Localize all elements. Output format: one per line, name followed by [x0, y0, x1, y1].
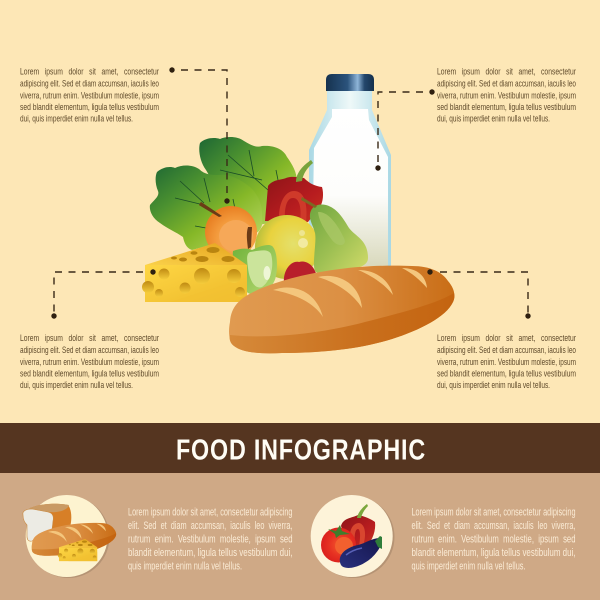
text block: top right	[437, 66, 577, 124]
text block: middle left	[20, 333, 160, 391]
text block: top left: viverra, rutrum enim. Vestibulum molestie, ipsum	[20, 90, 159, 102]
illustration: back lettuce leaf	[199, 137, 297, 228]
connector: bottom right	[427, 269, 531, 319]
text block: bottom left: rutrum enim. Vestibulum molestie, ipsum sed	[128, 534, 293, 546]
text block: top left: dui, quis imperdiet enim nulla vel tellus.	[20, 114, 133, 124]
illustration: red pepper	[265, 160, 323, 222]
illustration: apricot	[199, 202, 257, 258]
text block: top left	[20, 66, 160, 124]
title: FOOD INFOGRAPHIC	[176, 434, 426, 466]
illustration: red apple	[284, 262, 317, 282]
illustration: front lettuce leaf	[150, 165, 262, 250]
text block: middle left: Lorem ipsum dolor sit amet, consectetur	[20, 333, 160, 344]
text block: bottom left: quis imperdiet enim nulla vel tellus.	[128, 560, 242, 572]
connector: top right	[375, 89, 435, 171]
illustration: green pear	[301, 197, 368, 273]
bottom panel	[0, 473, 600, 600]
text block: bottom right: quis imperdiet enim nulla vel tellus.	[412, 560, 526, 572]
text block: bottom left: blandit elementum, ligula tellus vestibulum dui,	[128, 547, 292, 559]
icon: bread circle	[23, 495, 116, 578]
text block: top left: sed blandit elementum, ligula tellus vestibulum	[20, 102, 159, 113]
illustration: green apple	[233, 227, 277, 295]
illustration: milk bottle	[309, 74, 391, 266]
illustration: baguette	[229, 266, 454, 353]
connector: bottom left	[51, 269, 156, 319]
text block: middle left: dui, quis imperdiet enim nulla vel tellus.	[20, 380, 133, 391]
text block: top left: Lorem ipsum dolor sit amet, consectetur	[20, 66, 160, 78]
text block: bottom left: elit. Sed et diam accumsan, iaculis leo viverra,	[128, 520, 292, 532]
text block: middle right	[437, 333, 577, 391]
icon: vegetables circle	[311, 495, 394, 578]
text block: bottom left: Lorem ipsum dolor sit amet, consectetur adipiscing	[128, 506, 293, 518]
text block: top right: dui, quis imperdiet enim nulla vel tellus.	[437, 114, 550, 124]
illustration: cheese wedge	[142, 243, 247, 302]
text block: middle left: sed blandit elementum, ligula tellus vestibulum	[20, 368, 159, 380]
title band	[0, 423, 600, 473]
text block: middle left: viverra, rutrum enim. Vestibulum molestie, ipsum	[20, 357, 159, 368]
text block: middle right: dui, quis imperdiet enim nulla vel tellus.	[437, 380, 550, 391]
connector: top left	[169, 67, 230, 204]
background	[0, 0, 600, 423]
text block: top left: adipiscing elit. Sed et diam accumsan, iaculis leo	[20, 78, 159, 90]
illustration: yellow pear	[255, 215, 319, 279]
text block: bottom left	[128, 506, 293, 572]
text block: bottom right	[412, 506, 576, 572]
text block: middle left: adipiscing elit. Sed et diam accumsan, iaculis leo	[20, 345, 159, 356]
